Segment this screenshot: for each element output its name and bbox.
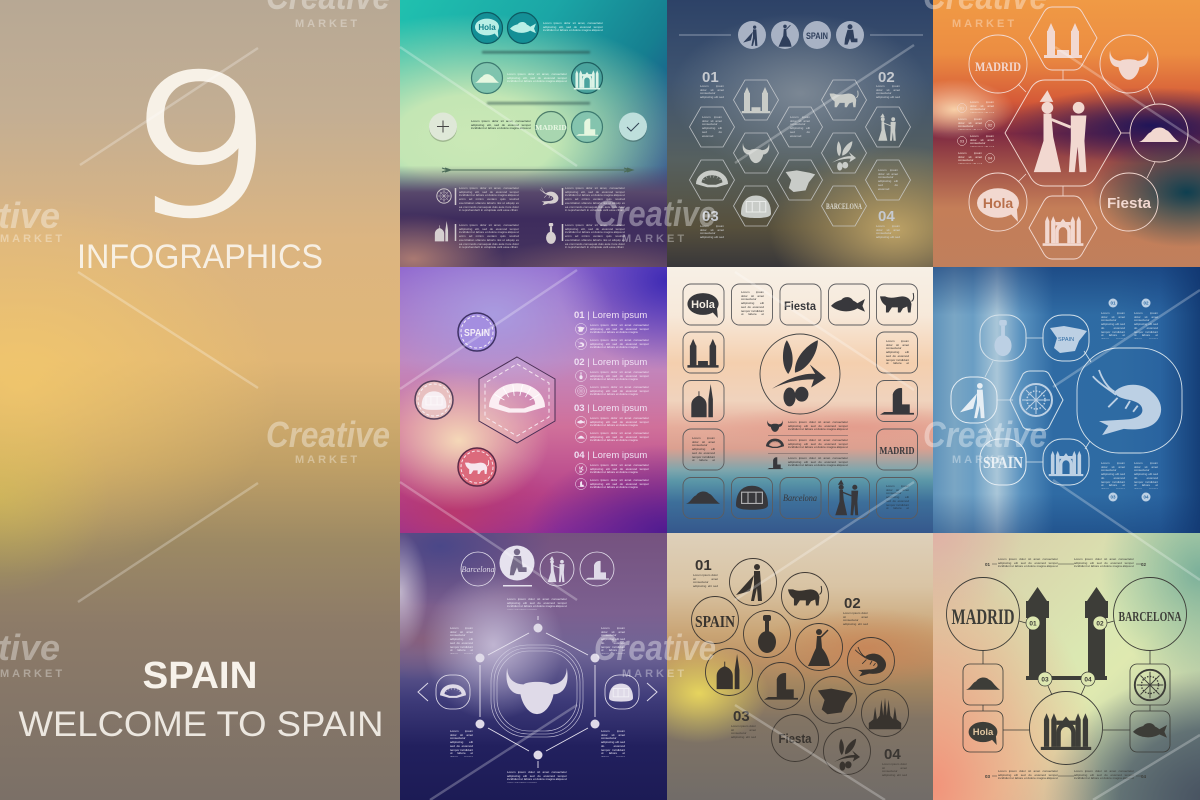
step numbers: 01 [702, 69, 719, 86]
numbered nodes [476, 624, 600, 760]
step labels [958, 104, 994, 162]
watermark logos: Creative [923, 414, 1047, 455]
icon: Spain label: SPAIN [983, 453, 1024, 472]
watermark market labels: MARKET [622, 668, 687, 680]
circle: Barcelona [1114, 578, 1186, 650]
button: check [619, 112, 647, 142]
connector lines [1018, 70, 1155, 196]
label: Barcelona: Barcelona [783, 493, 817, 503]
icon: arch [1043, 439, 1089, 485]
bottom legend: 04 [1141, 774, 1147, 779]
hexagon icons [696, 87, 896, 218]
step numbers: 04 [884, 746, 901, 763]
watermark logos [0, 0, 1047, 668]
icon: Spain map: SPAIN [1058, 337, 1074, 343]
central olive emblem [760, 334, 840, 414]
numbered nodes: 01 [1029, 620, 1037, 628]
hexagon with fan [479, 357, 555, 443]
list icons [576, 324, 586, 490]
watermark market labels: MARKET [295, 454, 360, 466]
watermark logos: Creative [594, 193, 716, 234]
label: Fiesta: Fiesta [778, 731, 812, 746]
label: Madrid: MADRID [880, 445, 915, 457]
panel: pastel Madrid Barcelona [933, 533, 1200, 800]
watermark market labels: MARKET [622, 233, 687, 245]
big number nine: 9 [127, 36, 273, 258]
tile: Hola [963, 711, 1003, 752]
step labels: 04 [988, 156, 993, 160]
step numbers: 02 [844, 595, 861, 612]
icon: Fiesta: Fiesta [1107, 195, 1152, 212]
panel: blue shrimp network [933, 267, 1200, 534]
numbered nodes: 02 [1096, 620, 1104, 628]
list headings: 03 | Lorem ipsum [574, 403, 647, 414]
tile icons [686, 293, 914, 515]
step numbers: 01 [1110, 301, 1116, 306]
step numbers: 04 [1143, 495, 1149, 500]
subtitle: INFOGRAPHICS [77, 238, 323, 276]
icon: lute [980, 315, 1026, 361]
watermark market labels: MARKET [0, 668, 65, 680]
watermark market labels: MARKET [952, 454, 1017, 466]
step numbers: 04 [878, 208, 895, 225]
circle icon: Hola [472, 12, 502, 44]
header icons: SPAIN [806, 31, 828, 42]
panel: teal infographic [400, 0, 667, 267]
step numbers: 01 [695, 557, 712, 574]
header icons [738, 21, 864, 49]
watermark logos: Creative [594, 627, 716, 668]
tile: fish [1130, 711, 1170, 752]
label: Spain: SPAIN [695, 612, 736, 631]
icon: Spain label [980, 439, 1026, 485]
icon: pizza [1010, 371, 1063, 430]
icon: rice mound [1130, 104, 1188, 162]
central hexagon [480, 616, 595, 768]
circle icons [717, 564, 901, 771]
panel: violet bull [400, 533, 667, 800]
bottom legend: 03 [985, 774, 991, 779]
circle outlines [692, 558, 908, 774]
hexagon grid [690, 80, 910, 226]
numbered nodes: 04 [1084, 676, 1092, 684]
icon: Madrid [969, 35, 1027, 93]
circle: Madrid: MADRID [952, 604, 1014, 629]
icon: bull head [1100, 35, 1158, 93]
watermark market labels: MARKET [295, 18, 360, 30]
step labels: 03 [960, 138, 965, 144]
tile: Hola: Hola [973, 727, 994, 738]
top icon row [461, 546, 614, 586]
panel: purple list [400, 267, 667, 534]
step numbers [702, 69, 895, 225]
icon: arch [1029, 196, 1097, 259]
circle: bus [415, 381, 453, 419]
panel: cover [0, 0, 400, 800]
grid tiles [683, 284, 918, 518]
watermark market labels: MARKET [0, 233, 65, 245]
divider [482, 51, 590, 54]
top icon row: Barcelona [461, 565, 495, 574]
icon: Hola: Hola [983, 195, 1013, 211]
tagline: WELCOME TO SPAIN [18, 705, 384, 744]
top legend [985, 562, 1147, 567]
legend icons [766, 420, 848, 469]
heading: Spain: SPAIN [142, 655, 258, 697]
step labels: 02 [988, 122, 993, 128]
watermark market labels: MARKET [952, 18, 1017, 30]
panel: amber circles [667, 533, 934, 800]
list headings: 01 | Lorem ipsum [574, 310, 647, 321]
step numbers [1108, 298, 1150, 502]
circle icon: fish [508, 12, 538, 44]
list headings: 04 | Lorem ipsum [574, 450, 647, 461]
label: Fiesta: Fiesta [784, 299, 816, 313]
side squircles [436, 675, 639, 709]
circle icon: arch [572, 62, 602, 94]
arrow line [442, 168, 633, 172]
circle: bull [458, 448, 496, 486]
list headings [574, 310, 647, 461]
icon: Fiesta [1100, 173, 1158, 231]
circle icon: Madrid: MADRID [535, 123, 567, 132]
icon: Hola [969, 173, 1027, 231]
panel: cream icon grid [667, 267, 934, 534]
centre hexagon with dancers [1005, 80, 1121, 186]
step numbers: 02 [878, 69, 895, 86]
central squircle: shrimp [1077, 348, 1182, 453]
panel: slate hexagons [667, 0, 934, 267]
network connectors [985, 338, 1091, 462]
step numbers: 02 [1143, 301, 1149, 306]
button: plus [429, 112, 457, 142]
step numbers [695, 557, 901, 763]
connector lines [983, 621, 1150, 730]
chevrons [418, 683, 657, 701]
small icons [435, 188, 562, 244]
tile: rice mound [963, 664, 1003, 705]
header rule [679, 34, 923, 36]
panel: orange dusk network [933, 0, 1200, 267]
step numbers: 03 [702, 208, 719, 225]
numbered nodes: 03 [1041, 676, 1049, 684]
icon: Hola [687, 293, 719, 318]
circle icon: Hola: Hola [478, 23, 496, 32]
icon: Hola: Hola [691, 299, 716, 311]
numbered nodes [1026, 616, 1107, 686]
label: Barcelona: BARCELONA [826, 202, 862, 211]
circle: arch [1030, 692, 1102, 764]
divider [487, 102, 590, 104]
icon: matador [951, 377, 997, 423]
step labels: 01 [960, 106, 965, 110]
icon: Spain map [1043, 315, 1089, 361]
circle icon: tower [572, 112, 602, 142]
top legend: 02 [1141, 562, 1147, 567]
icon: Madrid: MADRID [975, 59, 1021, 74]
circle icon: rice mound [472, 62, 502, 94]
list headings: 02 | Lorem ipsum [574, 357, 647, 368]
twin towers [1026, 587, 1108, 680]
step numbers: 03 [1110, 495, 1116, 500]
circle: Madrid [946, 578, 1020, 650]
top legend: 01 [985, 562, 991, 567]
circle icon: Madrid [535, 112, 567, 142]
watermark logos: Creative [266, 414, 390, 455]
watermark market labels [0, 18, 1017, 680]
circle: Spain [458, 313, 496, 351]
bottom legend [985, 774, 1147, 779]
icon: towers [1029, 7, 1097, 70]
circle: Spain: SPAIN [464, 328, 490, 339]
tile: pizza [1130, 664, 1170, 705]
step numbers: 03 [733, 708, 750, 725]
